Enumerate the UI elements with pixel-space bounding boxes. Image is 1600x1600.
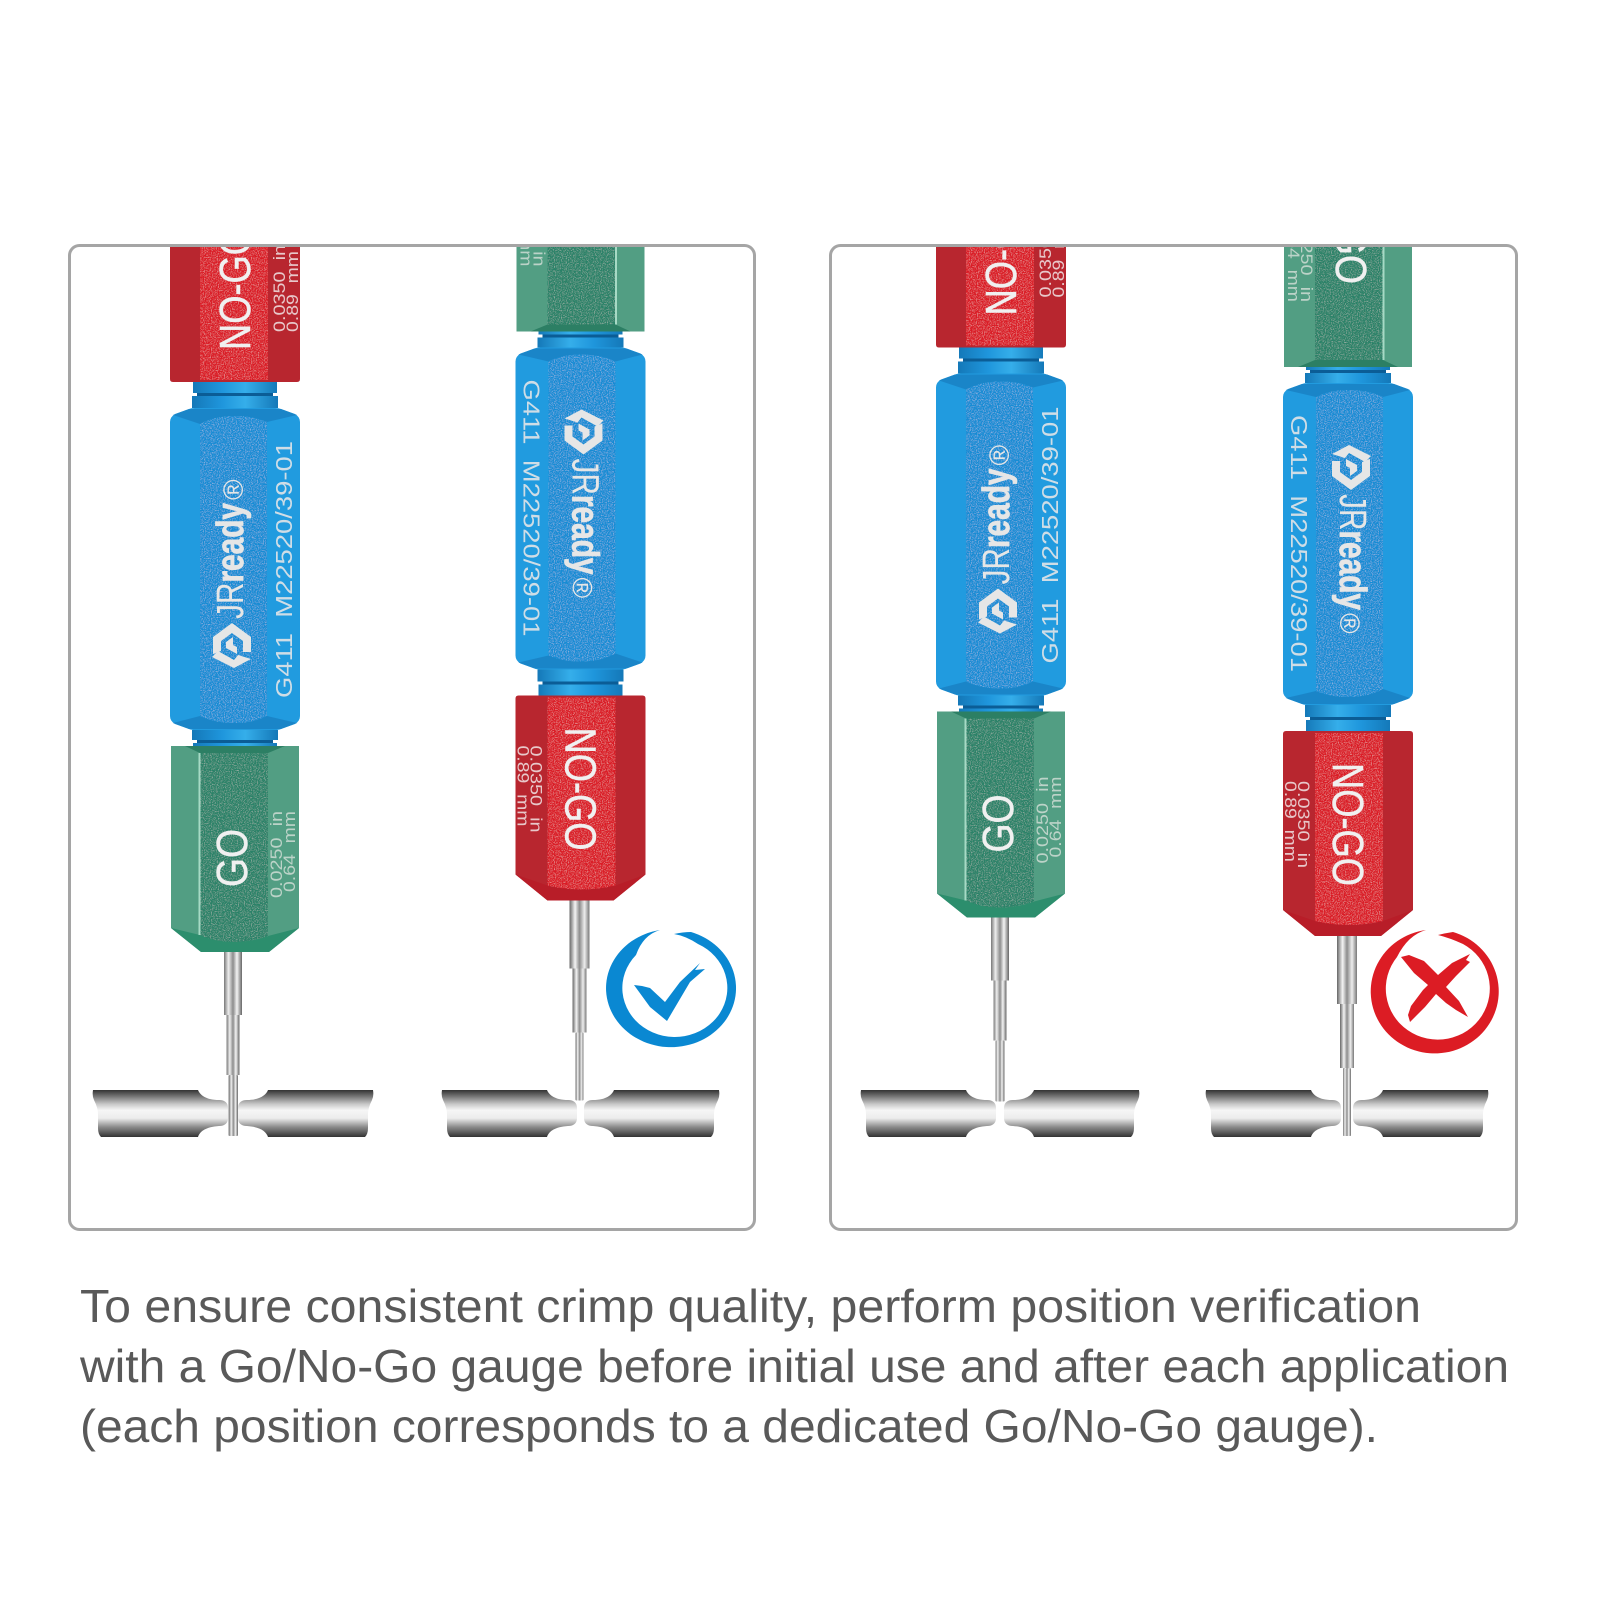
panel border [70, 246, 754, 1230]
gauge: NO-GO end passes through barrel (right): 0.64 mm [1284, 221, 1302, 302]
gauge: pin does not pass GO (left): GO [974, 794, 1023, 852]
gauge: pin does not pass GO (left): 0.89 mm [1050, 216, 1068, 298]
gauge: NO-GO end stops at barrel (right): 0.0350 in [526, 746, 544, 833]
gauge: pin passes GO, blocked at NO-GO (left): 0.89 mm [284, 251, 302, 332]
gauge: pin passes GO, blocked at NO-GO (left): JRready [210, 503, 252, 619]
gauge: pin passes GO, blocked at NO-GO (left): G411 M22520/39-01 [271, 441, 297, 698]
gauge: NO-GO end passes through barrel (right): JRready [1331, 494, 1373, 610]
gauge: NO-GO end passes through barrel (right): 0.0250 in [1297, 215, 1315, 302]
gauge: NO-GO end passes through barrel (right): G411 M22520/39-01 [1286, 415, 1312, 672]
gauge: pin passes GO, blocked at NO-GO (left): ® [218, 479, 249, 500]
caption text: (each position corresponds to a dedicated Go/No-Go gauge). [80, 1400, 1378, 1452]
gauge: NO-GO end passes through barrel (right): 0.89 mm [1281, 781, 1299, 862]
gauge: NO-GO end stops at barrel (right): JRready [564, 458, 606, 574]
gauge: NO-GO end stops at barrel (right): G411 M22520/39-01 [518, 380, 544, 636]
gauge: NO-GO end stops at barrel (right): 0.0250 in [530, 180, 548, 267]
icon: blue check mark in brush circle [606, 930, 736, 1047]
gauge: pin does not pass GO (left): 0.0250 in [1034, 776, 1052, 864]
gauge: NO-GO end passes through barrel (right): GO [1326, 226, 1375, 284]
wire barrel: right, pin inserted [1206, 1090, 1488, 1137]
gauge: pin does not pass GO (left): JRready [976, 468, 1018, 584]
caption text: To ensure consistent crimp quality, perform position verification [80, 1280, 1421, 1332]
gauge: pin does not pass GO (left): G411 M22520/39-01 [1037, 406, 1063, 664]
gauge: NO-GO end stops at barrel (right): 0.64 mm [516, 186, 534, 266]
gauge: NO-GO end passes through barrel (right): NO-GO [1323, 763, 1372, 886]
gauge: NO-GO end stops at barrel (right): GO [558, 190, 608, 248]
gauge: pin passes GO, blocked at NO-GO (left) [170, 177, 302, 1136]
caption text [79, 1280, 1509, 1452]
wire barrel: right, pin stops [442, 1090, 719, 1137]
gauge: NO-GO end passes through barrel (right): 0.0350 in [1294, 781, 1312, 868]
wire barrel: left, pin inserted [93, 1090, 373, 1137]
wire barrel: left, pin stops [861, 1090, 1139, 1137]
gauge: NO-GO end stops at barrel (right): 0.89 mm [514, 746, 532, 826]
gauge: pin passes GO, blocked at NO-GO (left): NO-GO [211, 227, 260, 350]
panel: incorrect gauge use [830, 142, 1516, 1230]
gauge: pin passes GO, blocked at NO-GO (left): 0.0350 in [271, 245, 289, 332]
pin tip over right barrel [1343, 1069, 1351, 1136]
gauge: pin does not pass GO (left): 0.64 mm [1047, 776, 1065, 858]
gauge: NO-GO end passes through barrel (right) [1283, 247, 1413, 1136]
icon: red cross in brush circle [1371, 930, 1499, 1053]
gauge: pin passes GO, blocked at NO-GO (left): GO [208, 829, 257, 887]
gauge: NO-GO end passes through barrel (right): ® [1334, 613, 1365, 634]
gauge: pin does not pass GO (left): NO-GO [977, 192, 1026, 316]
gauge: pin does not pass GO (left): 0.0350 in [1037, 210, 1055, 298]
gauge: NO-GO end stops at barrel (right) [516, 247, 646, 1100]
panel border [830, 246, 1516, 1230]
gauge: NO-GO end stops at barrel (right): NO-GO [556, 728, 604, 850]
gauge: pin passes GO, blocked at NO-GO (left): 0.0250 in [268, 811, 286, 898]
panel: correct gauge use [70, 126, 754, 1230]
pin tip over barrel [229, 1075, 238, 1136]
gauge: pin passes GO, blocked at NO-GO (left): 0.64 mm [281, 811, 299, 892]
infographic canvas [68, 244, 1518, 1452]
gauge: pin does not pass GO (left) [936, 247, 1066, 1102]
gauge: pin does not pass GO (left): ® [984, 444, 1015, 466]
caption text: with a Go/No-Go gauge before initial use and after each application [79, 1340, 1509, 1392]
gauge: NO-GO end stops at barrel (right): ® [566, 578, 598, 598]
